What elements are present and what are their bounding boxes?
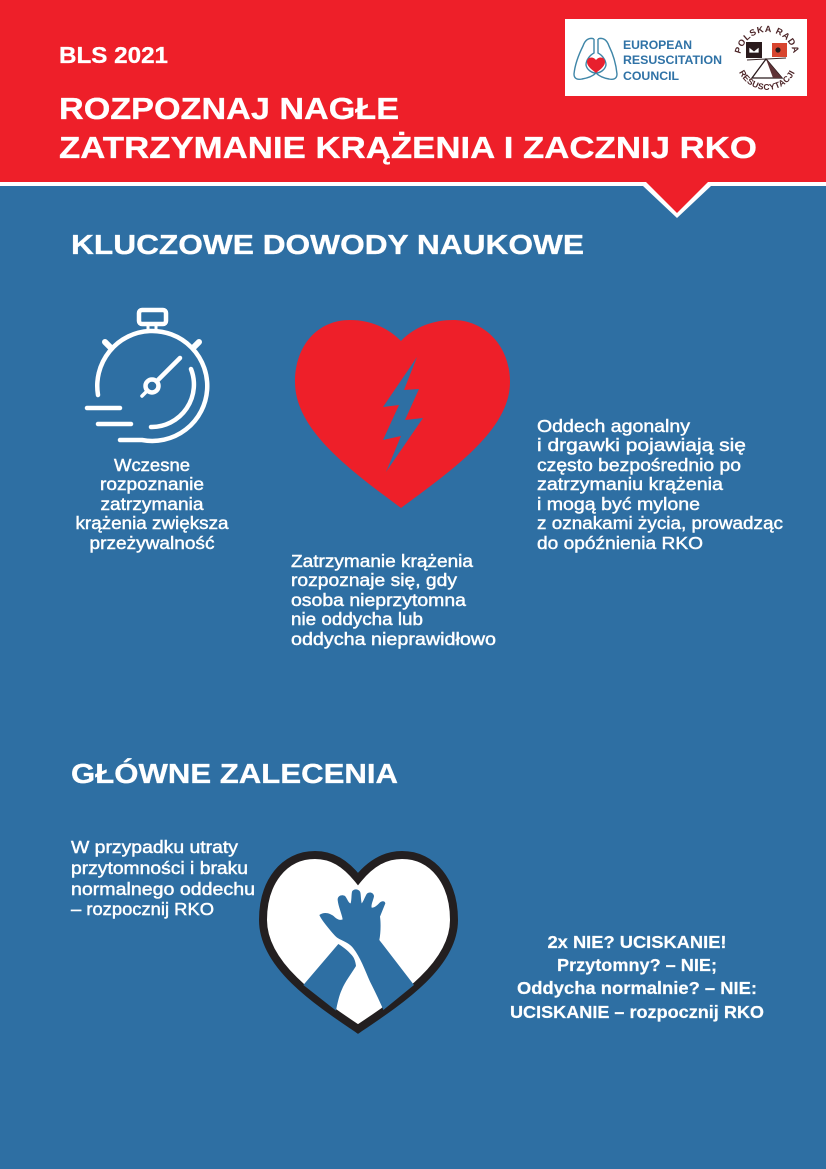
text: agonal breathing	[537, 416, 783, 553]
text: agonal breathing: często bezpośrednio po	[537, 455, 741, 475]
text: cardiac arrest recognition: rozpoznaje się, gdy	[291, 570, 457, 590]
title: ROZPOZNAJ NAGŁE	[59, 91, 399, 126]
text: cardiac arrest recognition	[291, 551, 496, 649]
text: European Resuscitation Council: COUNCIL	[623, 69, 679, 83]
text: start CPR: przytomności i braku	[71, 858, 248, 878]
icon: lungs with heart	[574, 38, 617, 79]
logo: Polska Rada Resuscytacji	[734, 26, 799, 90]
logos panel	[565, 19, 807, 96]
title: ZATRZYMANIE KRĄŻENIA I ZACZNIJ RKO	[59, 130, 757, 165]
text: European Resuscitation Council	[623, 38, 722, 83]
heading: main recommendations: GŁÓWNE ZALECENIA	[71, 758, 398, 789]
text: compressions callout: Oddycha normalnie? – NIE:	[517, 978, 757, 998]
text: early recognition: przeżywalność	[90, 533, 215, 553]
text: cardiac arrest recognition: osoba nieprzytomna	[291, 590, 466, 610]
text: agonal breathing: Oddech agonalny	[537, 416, 690, 436]
title	[59, 91, 757, 165]
icon: stopwatch	[87, 310, 207, 441]
text: compressions callout	[510, 932, 764, 1022]
text: early recognition: zatrzymania	[100, 494, 204, 514]
text: start CPR	[71, 837, 255, 919]
icon: red heart with lightning bolt	[295, 320, 510, 508]
text: European Resuscitation Council: EUROPEAN	[623, 38, 692, 52]
text: cardiac arrest recognition: oddycha nieprawidłowo	[291, 629, 496, 649]
logo: Polska Rada Resuscytacji: POLSKA RADA	[734, 26, 799, 54]
text: compressions callout: UCISKANIE – rozpocznij RKO	[510, 1002, 764, 1022]
text: agonal breathing: i drgawki pojawiają się	[537, 435, 746, 455]
text: cardiac arrest recognition: Zatrzymanie krążenia	[291, 551, 473, 571]
text: cardiac arrest recognition: nie oddycha lub	[291, 609, 423, 629]
text: start CPR: W przypadku utraty	[71, 837, 238, 857]
text: compressions callout: Przytomny? – NIE;	[557, 955, 717, 975]
text: agonal breathing: i mogą być mylone	[537, 494, 700, 514]
text: start CPR: normalnego oddechu	[71, 879, 255, 899]
text: agonal breathing: zatrzymaniu krążenia	[537, 474, 723, 494]
text: early recognition: Wczesne	[114, 455, 190, 475]
text: start CPR: – rozpocznij RKO	[71, 899, 214, 919]
text: agonal breathing: do opóźnienia RKO	[537, 533, 703, 553]
text: compressions callout: 2x NIE? UCISKANIE!	[548, 932, 726, 952]
text: European Resuscitation Council: RESUSCITATION	[623, 53, 722, 67]
label: BLS 2021: BLS 2021	[59, 42, 168, 68]
text: early recognition: rozpoznanie	[100, 474, 204, 494]
text: early recognition: krążenia zwiększa	[76, 513, 229, 533]
header banner	[0, 0, 826, 218]
text: agonal breathing: z oznakami życia, prowadząc	[537, 513, 783, 533]
icon: heart with hands	[263, 855, 454, 1029]
logo: Polska Rada Resuscytacji: RESUSCYTACJI	[739, 70, 794, 90]
text: early recognition	[76, 455, 229, 553]
heading: key evidence: KLUCZOWE DOWODY NAUKOWE	[71, 229, 584, 260]
